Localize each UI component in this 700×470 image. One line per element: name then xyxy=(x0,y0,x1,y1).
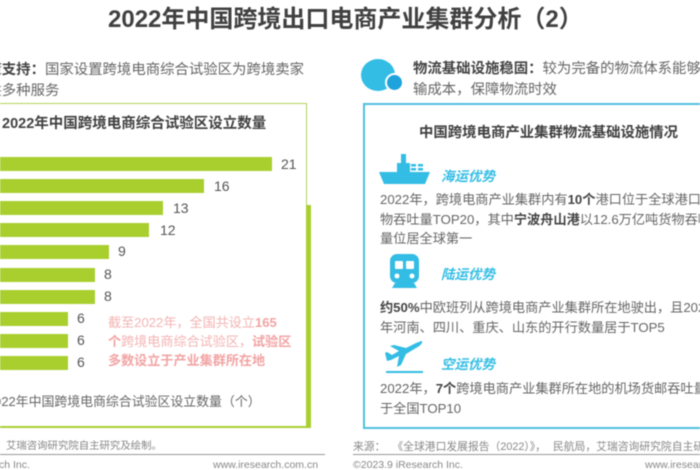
sea text: 量位居全球第一 xyxy=(380,231,472,246)
right intro text xyxy=(412,60,700,98)
bar 21 xyxy=(0,157,272,171)
right intro text: 输成本，保障物流时效 xyxy=(413,82,557,98)
sea heading: 海运优势 xyxy=(441,169,495,184)
icon: ship xyxy=(378,153,430,185)
bar 16 xyxy=(0,179,204,193)
panel: logistics xyxy=(363,103,700,429)
value 9: 9 xyxy=(118,243,126,259)
callout xyxy=(108,315,292,368)
chart heading: 2022年中国跨境电商综合试验区设立数量 xyxy=(2,116,266,132)
bar 9 xyxy=(0,245,109,259)
land text: 年河南、四川、重庆、山东的开行数量居于TOP5 xyxy=(380,320,665,335)
panel: pilot zones chart xyxy=(0,102,312,429)
air text xyxy=(380,381,700,416)
bar 8a xyxy=(0,268,95,282)
icon: circles xyxy=(360,58,403,92)
left intro text xyxy=(0,60,304,99)
bar 12 xyxy=(0,223,149,237)
bar 6a xyxy=(0,312,68,326)
panel right accent xyxy=(306,205,311,428)
bar 6b xyxy=(0,334,68,348)
small circle xyxy=(385,73,404,92)
large circle xyxy=(361,59,395,91)
bar chart xyxy=(0,156,297,371)
bar 13 xyxy=(0,201,163,215)
value 6b: 6 xyxy=(77,332,85,348)
value 8b: 8 xyxy=(104,288,112,304)
callout: 截至2022年，全国共设立165 xyxy=(108,315,277,330)
value 8a: 8 xyxy=(104,266,112,282)
icon: plane xyxy=(384,340,424,374)
left source: 艾瑞咨询研究院自主研究及绘制。 xyxy=(6,441,162,452)
callout: 个跨境电商综合试验区，试验区 xyxy=(108,334,291,349)
callout: 多数设立于产业集群所在地 xyxy=(108,353,265,368)
icon: train xyxy=(389,253,420,289)
land heading: 陆运优势 xyxy=(441,267,495,282)
land text xyxy=(380,300,700,335)
logistics heading: 中国跨境电商产业集群物流基础设施情况 xyxy=(419,125,678,141)
title: 2022年中国跨境出口电商产业集群分析（2） xyxy=(108,6,583,33)
value 12: 12 xyxy=(160,222,176,238)
value 13: 13 xyxy=(173,200,189,216)
value 6a: 6 xyxy=(77,310,85,326)
air text: 于全国TOP10 xyxy=(380,401,461,416)
sea text xyxy=(380,192,700,246)
bar 6c xyxy=(0,356,68,370)
value 21: 21 xyxy=(281,156,297,172)
air heading: 空运优势 xyxy=(441,357,495,372)
bar 8b xyxy=(0,290,95,304)
value 6c: 6 xyxy=(77,354,85,370)
right footer rule xyxy=(353,454,700,455)
value 16: 16 xyxy=(214,178,230,194)
panel border xyxy=(0,103,307,428)
left footer rule xyxy=(0,454,325,455)
